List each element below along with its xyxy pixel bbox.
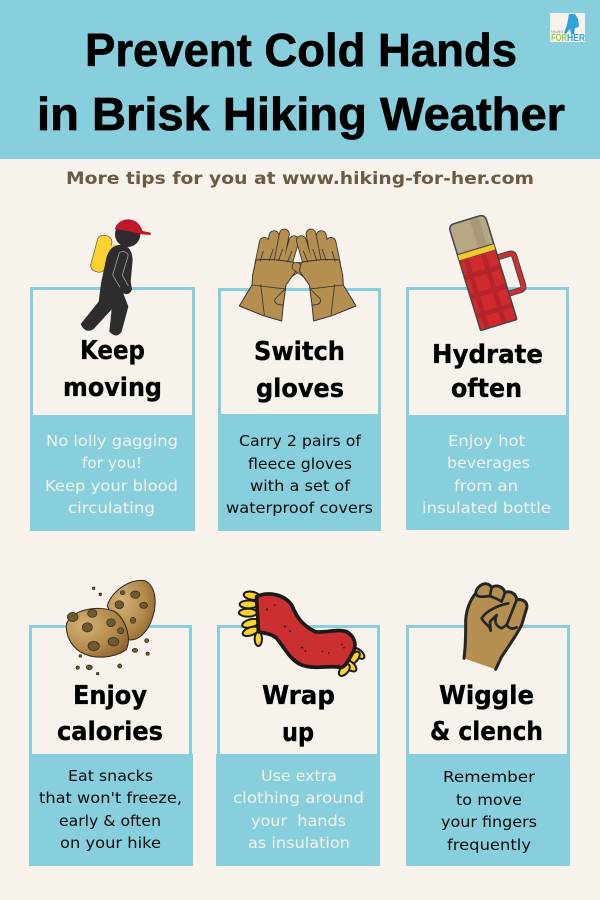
heading: often xyxy=(451,374,522,404)
body text: Remember xyxy=(443,768,536,786)
body text: Enjoy hot xyxy=(448,432,525,450)
heading: Keep xyxy=(80,336,145,366)
panel: keep moving xyxy=(30,219,195,531)
body text xyxy=(45,432,178,517)
title: in Brisk Hiking Weather xyxy=(37,88,565,140)
heading: moving xyxy=(63,373,162,403)
body text: from an xyxy=(454,477,518,495)
body text: frequently xyxy=(447,836,531,854)
icon: gloves xyxy=(239,234,356,321)
heading: & clench xyxy=(430,717,543,747)
body text: your fingers xyxy=(441,813,537,831)
body text: insulated bottle xyxy=(422,499,551,517)
logo: HER xyxy=(567,33,586,44)
body text: for you! xyxy=(82,454,142,472)
icon: fist xyxy=(464,584,527,669)
body text xyxy=(441,768,537,854)
panel: switch gloves xyxy=(218,234,381,531)
title xyxy=(37,24,565,140)
body text xyxy=(226,432,373,517)
panel: wiggle and clench xyxy=(406,584,570,866)
body text: with a set of xyxy=(250,477,351,495)
heading xyxy=(57,681,163,747)
left glove xyxy=(239,234,299,321)
title: Prevent Cold Hands xyxy=(85,24,517,76)
icon: thermos xyxy=(448,210,532,331)
icon: cookies xyxy=(66,580,155,675)
logo: HIKING xyxy=(551,30,563,34)
body text: Eat snacks xyxy=(68,767,153,785)
heading: calories xyxy=(57,717,163,747)
body text xyxy=(422,432,551,517)
body text: Keep your blood xyxy=(45,477,178,495)
body text: on your hike xyxy=(60,834,161,852)
body text: waterproof covers xyxy=(226,499,373,517)
body text xyxy=(39,767,182,852)
body text: to move xyxy=(456,791,522,809)
heading xyxy=(254,337,345,404)
panel: enjoy calories xyxy=(29,580,193,866)
logo xyxy=(550,13,586,44)
body text: Carry 2 pairs of xyxy=(239,432,362,450)
body text: clothing around xyxy=(233,789,364,807)
heading xyxy=(262,681,335,748)
logo: FOR xyxy=(551,33,568,44)
body text: circulating xyxy=(68,499,155,517)
body text: as insulation xyxy=(248,834,350,852)
body text: that won't freeze, xyxy=(39,789,182,807)
right glove xyxy=(296,234,356,321)
body text xyxy=(233,767,364,852)
heading xyxy=(430,681,543,747)
body text: Use extra xyxy=(261,767,337,785)
body text: No lolly gagging xyxy=(46,432,178,450)
body text: early & often xyxy=(59,812,161,830)
icon: hiker xyxy=(81,219,151,335)
subtitle: More tips for you at www.hiking-for-her.com xyxy=(66,169,534,189)
body text: fleece gloves xyxy=(248,455,352,473)
body text: beverages xyxy=(447,454,530,472)
icon: scarf xyxy=(239,590,366,678)
heading: up xyxy=(282,718,314,748)
panel: hydrate often xyxy=(406,210,569,530)
heading: Wiggle xyxy=(439,681,534,711)
heading: Hydrate xyxy=(432,340,543,370)
heading: Wrap xyxy=(262,681,335,711)
heading xyxy=(63,336,162,403)
heading: Enjoy xyxy=(73,681,147,711)
heading: gloves xyxy=(256,374,344,404)
heading xyxy=(432,340,543,404)
heading: Switch xyxy=(254,337,345,367)
header banner xyxy=(0,0,600,159)
panel: wrap up xyxy=(216,590,380,866)
body text: your hands xyxy=(251,812,346,830)
